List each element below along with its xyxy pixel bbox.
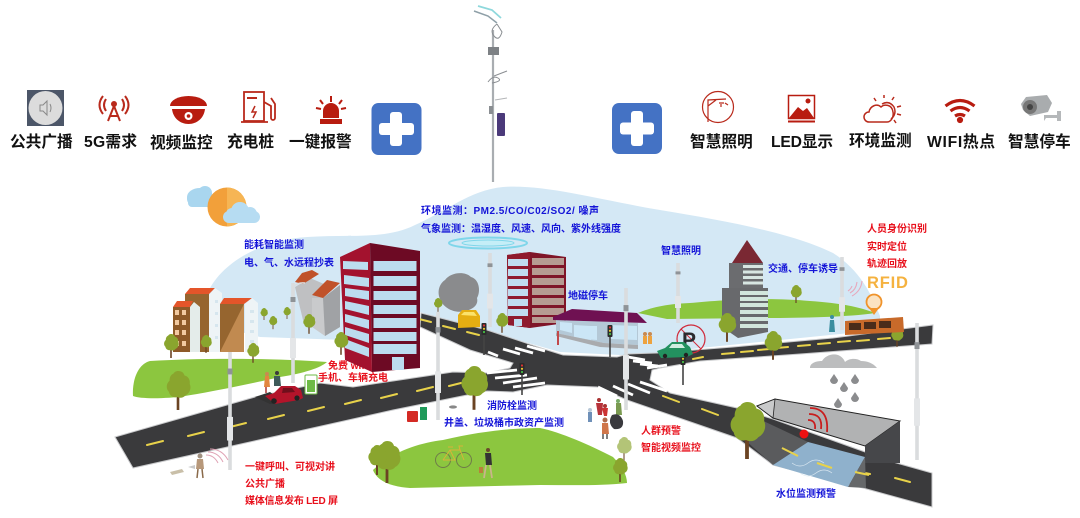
top row: left labels: 视频监控	[150, 133, 213, 152]
top row: right plus	[612, 103, 662, 154]
labels: RFID identification: 轨迹回放	[867, 257, 907, 270]
hill: left	[133, 359, 327, 398]
labels: energy monitoring: 电、气、水远程抄表	[244, 256, 334, 269]
cyan sensing disc	[449, 238, 527, 248]
labels: municipal asset monitoring: 消防栓监测	[487, 399, 537, 412]
free wifi label	[318, 359, 388, 384]
red and green bins, manhole	[407, 405, 457, 422]
top row: left labels: 一键报警	[289, 132, 352, 151]
icon: smart lighting	[702, 92, 734, 122]
labels: crowd warning: 人群预警	[641, 424, 681, 437]
lane dashes	[147, 319, 910, 482]
icon: bicycle	[436, 446, 472, 468]
labels: RFID identification: 实时定位	[867, 240, 907, 253]
icon: rain cloud with drops	[810, 354, 877, 408]
tunnel with flood water	[745, 399, 900, 488]
bottom hill trees	[368, 437, 632, 483]
hill: back	[638, 299, 875, 319]
top row: left labels: 充电桩	[227, 132, 274, 151]
bus, RFID pin and wifi: RFID	[867, 274, 909, 292]
label: smart lighting: 智慧照明	[661, 244, 701, 257]
smoke and burning vehicle	[439, 273, 480, 328]
tree by tower	[334, 332, 348, 355]
labels: energy monitoring: 能耗智能监测	[244, 238, 304, 251]
top row: right labels: 智慧停车	[1008, 132, 1071, 151]
wifi alert arcs	[808, 408, 827, 432]
red car and charger	[255, 375, 317, 404]
bus, RFID pin and wifi	[845, 274, 909, 335]
road network	[115, 313, 933, 507]
labels: environment: 环境监测：PM2.5/CO/C02/SO2/ 噪声	[421, 204, 599, 217]
labels: energy monitoring	[244, 238, 334, 269]
free wifi label: 免费 wifi	[328, 359, 368, 372]
trees right group	[434, 285, 903, 410]
top row: left labels	[10, 132, 352, 152]
top row: right labels: LED显示	[771, 134, 833, 151]
icon: environment cloud and sun	[864, 95, 901, 123]
labels: help point: 一键呼叫、可视对讲	[245, 460, 335, 473]
smart pole	[474, 6, 507, 182]
building: grey right tower	[722, 240, 768, 338]
labels: crowd warning: 智能视频监控	[641, 441, 701, 454]
top row: left icons	[27, 90, 346, 126]
icon: sun and clouds	[187, 186, 260, 226]
top row: right labels: WIFI热点	[927, 132, 995, 151]
top row: right labels: 环境监测	[849, 131, 912, 150]
labels: crowd warning	[641, 424, 701, 454]
LED panel	[497, 113, 505, 136]
crosswalks	[487, 346, 667, 396]
crowd of pedestrians	[588, 398, 623, 439]
labels: municipal asset monitoring: 井盖、垃圾桶市政资产监测	[444, 416, 564, 429]
building: left apartment cluster	[173, 288, 258, 352]
labels: environment	[421, 204, 621, 235]
labels: help point: 媒体信息发布 LED 屏	[245, 494, 338, 507]
plus button left	[372, 103, 422, 155]
people by car	[264, 371, 281, 393]
labels: RFID identification	[867, 222, 927, 270]
light poles	[227, 253, 920, 470]
green car and no-parking sign: P	[682, 329, 696, 352]
hill: bottom	[373, 428, 627, 488]
labels: environment: 气象监测：温湿度、风速、风向、紫外线强度	[421, 222, 621, 235]
building: grey houses	[295, 270, 340, 336]
icon: alarm beacon	[316, 96, 346, 124]
top row: left labels: 公共广播	[10, 133, 73, 151]
icon: public broadcast	[27, 90, 64, 126]
building: middle red block	[507, 252, 566, 328]
person at help point with wifi	[170, 449, 228, 478]
labels: RFID identification: 人员身份识别	[867, 222, 927, 235]
pedestrians small	[557, 315, 835, 345]
building: parking office	[553, 309, 647, 349]
icon: LED picture	[788, 96, 815, 122]
labels: municipal asset monitoring	[444, 399, 564, 429]
tree by tunnel	[731, 402, 765, 459]
building: tall red tower	[340, 243, 420, 372]
green car and no-parking sign	[657, 325, 705, 358]
labels: help point	[245, 460, 338, 507]
background sky	[208, 187, 880, 356]
tree and lamp near middle building	[496, 313, 508, 333]
icon: wifi	[946, 100, 974, 122]
labels: help point: 公共广播	[245, 477, 285, 490]
top row: right icons	[702, 92, 1061, 123]
traffic lights	[482, 323, 686, 395]
top row: right labels	[690, 131, 1071, 151]
person with child	[479, 448, 492, 478]
free wifi label: 手机、车辆充电	[318, 371, 388, 384]
top row: left labels: 5G需求	[84, 133, 137, 151]
label: geomagnetic parking: 地磁停车	[568, 289, 608, 302]
icon: parking camera	[1021, 95, 1061, 121]
label: water level: 水位监测预警	[776, 487, 836, 500]
building: green-side poles and trees left	[164, 307, 315, 410]
icon: charging pile	[241, 92, 275, 122]
top row: right labels: 智慧照明	[690, 132, 753, 151]
red sensor dot	[800, 430, 808, 438]
label: traffic guidance: 交通、停车诱导	[768, 262, 838, 275]
icon: 5G antenna	[100, 96, 128, 121]
icon: video surveillance camera	[170, 96, 207, 124]
